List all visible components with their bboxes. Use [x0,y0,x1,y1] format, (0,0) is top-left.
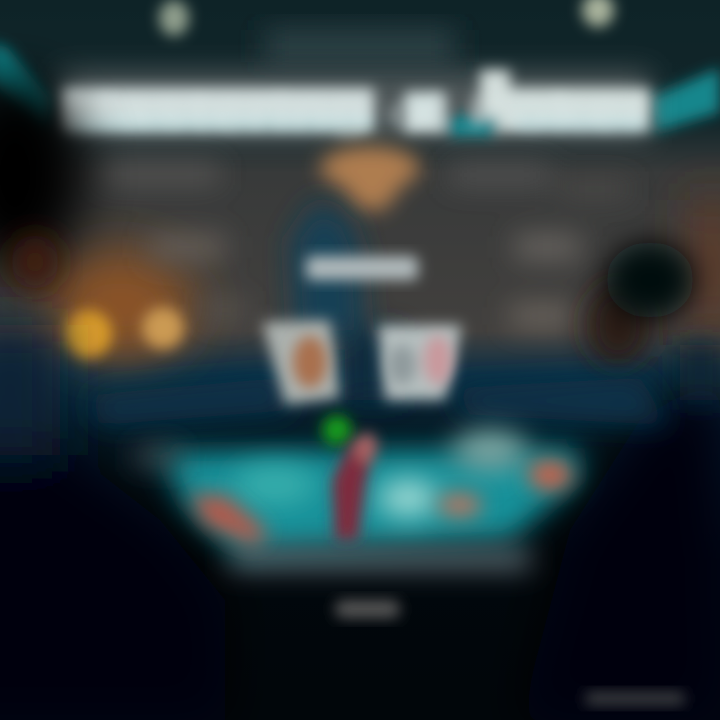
bottom label [335,600,400,618]
right player silhouette [571,228,720,552]
player arms [90,378,670,425]
playing card left [262,320,340,405]
left text column [100,165,245,320]
ceiling lights [159,0,614,36]
subtitle band [265,30,455,62]
table surface [135,430,580,568]
footer mark [585,692,685,705]
coins [64,307,184,358]
playing card right [378,325,462,400]
background: poker room [0,0,720,508]
teal banner ribbons [0,42,720,132]
warm room glow [45,200,720,360]
red hands on table [190,460,572,545]
title [60,70,650,138]
right text column [450,165,630,327]
center figure: blue body [290,200,405,400]
chart arrow: red bar [332,433,378,540]
center label [306,256,418,280]
center emblem: orange shield [320,146,420,210]
left player silhouette [0,52,170,552]
chart arrow: green up [322,415,352,445]
title: Mastering of Poker [62,86,648,138]
